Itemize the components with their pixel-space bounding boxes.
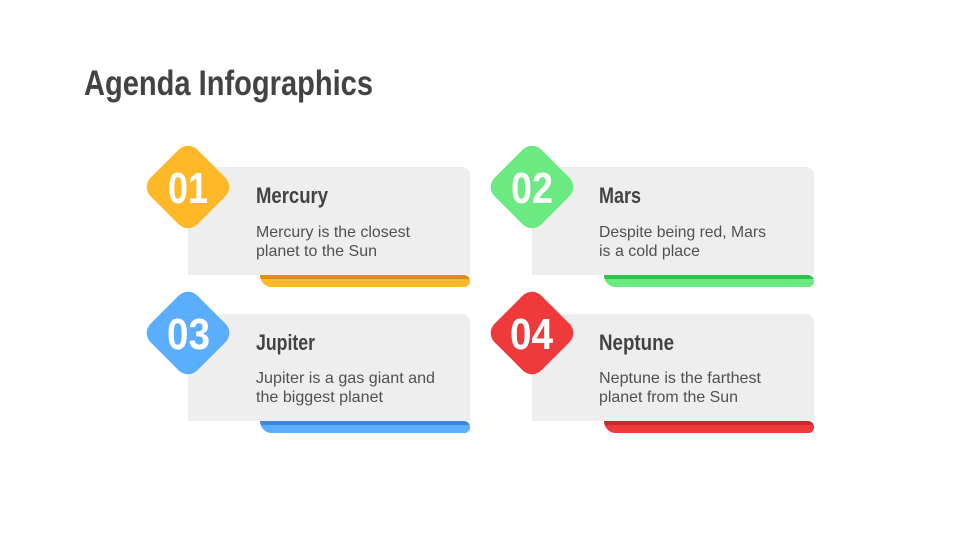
text block: Jupiter: Jupiter is a gas giant and	[256, 370, 435, 387]
panel: Jupiter	[141, 286, 470, 433]
icon: diamond 01: 01	[168, 164, 208, 213]
card background: Jupiter	[188, 314, 470, 421]
heading: Mars: Mars	[599, 183, 641, 208]
text block: Jupiter: the biggest planet	[256, 389, 384, 406]
card background: Mars	[532, 167, 814, 275]
heading: Jupiter: Jupiter	[256, 330, 315, 355]
icon: diamond 03: 03	[167, 310, 210, 359]
heading: Neptune: Neptune	[599, 330, 674, 355]
panel: Mercury	[141, 140, 470, 287]
text block: Mars: is a cold place	[599, 243, 700, 260]
text block: Mars	[599, 224, 766, 260]
icon: diamond 04	[485, 286, 579, 380]
accent bar: Jupiter	[260, 421, 470, 433]
panel: Neptune	[485, 286, 814, 433]
text block: Neptune	[599, 370, 762, 406]
heading: Mercury: Mercury	[256, 183, 329, 208]
text block: Mercury: planet to the Sun	[256, 243, 377, 260]
text block: Neptune: Neptune is the farthest	[599, 370, 762, 387]
text block: Mercury: Mercury is the closest	[256, 224, 411, 241]
accent bar: Mars	[604, 275, 814, 287]
icon: diamond 03	[141, 286, 235, 380]
text block: Neptune: planet from the Sun	[599, 389, 738, 406]
icon: diamond 02	[485, 140, 579, 234]
panel: Mars	[485, 140, 814, 287]
icon: diamond 02: 02	[511, 164, 553, 213]
accent bar: Neptune	[604, 421, 814, 433]
card background: Mercury	[188, 167, 470, 275]
title: Agenda Infographics	[84, 64, 373, 103]
text block: Mars: Despite being red, Mars	[599, 224, 766, 241]
card background: Neptune	[532, 314, 814, 421]
accent bar: Mercury	[260, 275, 470, 287]
text block: Jupiter	[256, 370, 435, 406]
text block: Mercury	[256, 224, 411, 260]
icon: diamond 01	[141, 140, 235, 234]
icon: diamond 04: 04	[510, 310, 553, 359]
